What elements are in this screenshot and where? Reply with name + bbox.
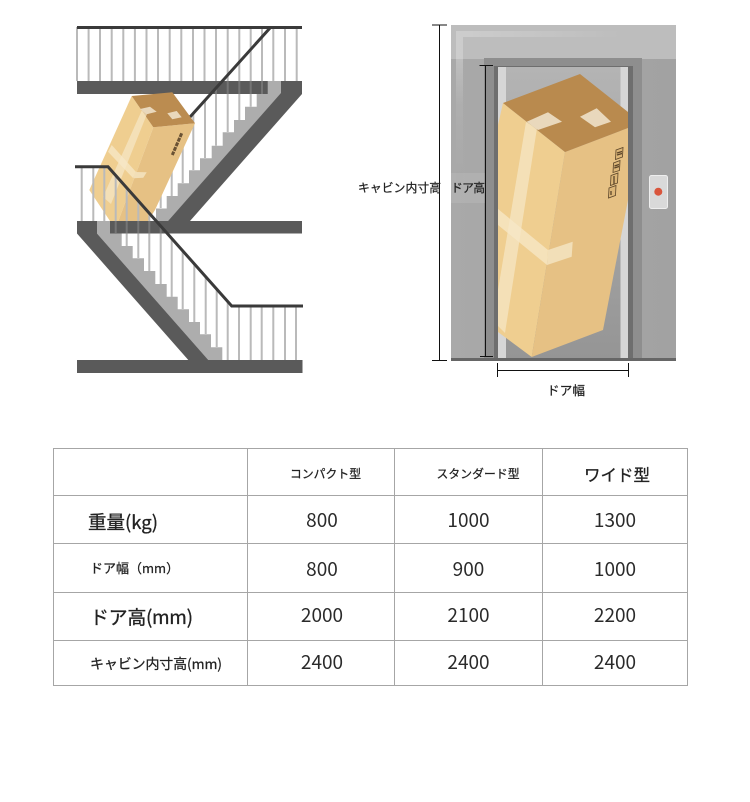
upper landing slab — [77, 81, 268, 94]
row label: door width: ドア幅（mm） — [90, 558, 179, 577]
lower flight balusters — [82, 167, 296, 360]
elevator floor strip — [451, 358, 676, 361]
handling icons — [608, 148, 623, 198]
upper stair steps — [156, 81, 281, 221]
dimension: door width — [498, 363, 628, 377]
row values: weight: 1300 — [594, 506, 636, 533]
cardboard box in elevator — [498, 74, 628, 357]
row values: door width — [306, 555, 636, 582]
elevator transom — [451, 25, 676, 59]
row values: cabin inner height: 2400 — [447, 648, 490, 675]
elevator wall — [451, 25, 676, 358]
cardboard box on stairs — [89, 92, 195, 221]
illustration: box in elevator — [451, 25, 676, 361]
label backing patch — [451, 173, 485, 203]
upper flight balusters — [161, 27, 262, 208]
upper railing balusters — [77, 27, 297, 81]
middle landing slab — [110, 221, 302, 234]
table grid — [54, 448, 688, 686]
row label: weight: 重量(kg) — [88, 509, 158, 535]
row values: door height: 2100 — [447, 601, 490, 628]
lower stair stringer — [77, 221, 208, 360]
lower stair steps — [97, 221, 222, 360]
row label: door height: ドア高(mm) — [90, 603, 193, 630]
row values: door width: 1000 — [594, 555, 636, 582]
middle slab overlay on balusters — [110, 221, 170, 234]
wall light reflection — [456, 31, 620, 59]
door opening — [498, 67, 628, 358]
row values: door height: 2000 — [301, 601, 343, 628]
label: door height: ドア高 — [451, 179, 485, 196]
row values: cabin inner height — [301, 648, 636, 675]
specification table — [54, 448, 688, 686]
row values: weight — [306, 506, 636, 533]
row label: cabin inner height: キャビン内寸高(mm) — [90, 654, 222, 674]
row values: door height: 2200 — [594, 601, 636, 628]
landing slab overlay on balusters — [205, 81, 268, 94]
row values: weight: 800 — [306, 506, 338, 533]
row values: cabin inner height: 2400 — [301, 648, 343, 675]
dimension: door height — [480, 66, 493, 356]
label: cabin inner height: キャビン内寸高 — [358, 179, 441, 196]
label: door width: ドア幅 — [547, 380, 585, 399]
upper stair stringer — [168, 81, 302, 221]
header: wide type: ワイド型 — [584, 462, 650, 486]
bottom landing slab — [77, 360, 302, 373]
door frame — [484, 58, 642, 358]
row values: door height — [301, 601, 636, 628]
row values: weight: 1000 — [447, 506, 490, 533]
dimension: cabin height — [432, 25, 447, 360]
row values: door width: 900 — [453, 555, 484, 582]
call button — [650, 176, 668, 208]
row values: door width: 800 — [306, 555, 338, 582]
illustration: box carried on stairs — [75, 27, 303, 373]
lower handrail — [75, 167, 303, 306]
header: standard type: スタンダード型 — [436, 465, 520, 482]
header: compact type: コンパクト型 — [290, 465, 361, 482]
row values: cabin inner height: 2400 — [594, 648, 636, 675]
upper handrail — [77, 28, 302, 117]
